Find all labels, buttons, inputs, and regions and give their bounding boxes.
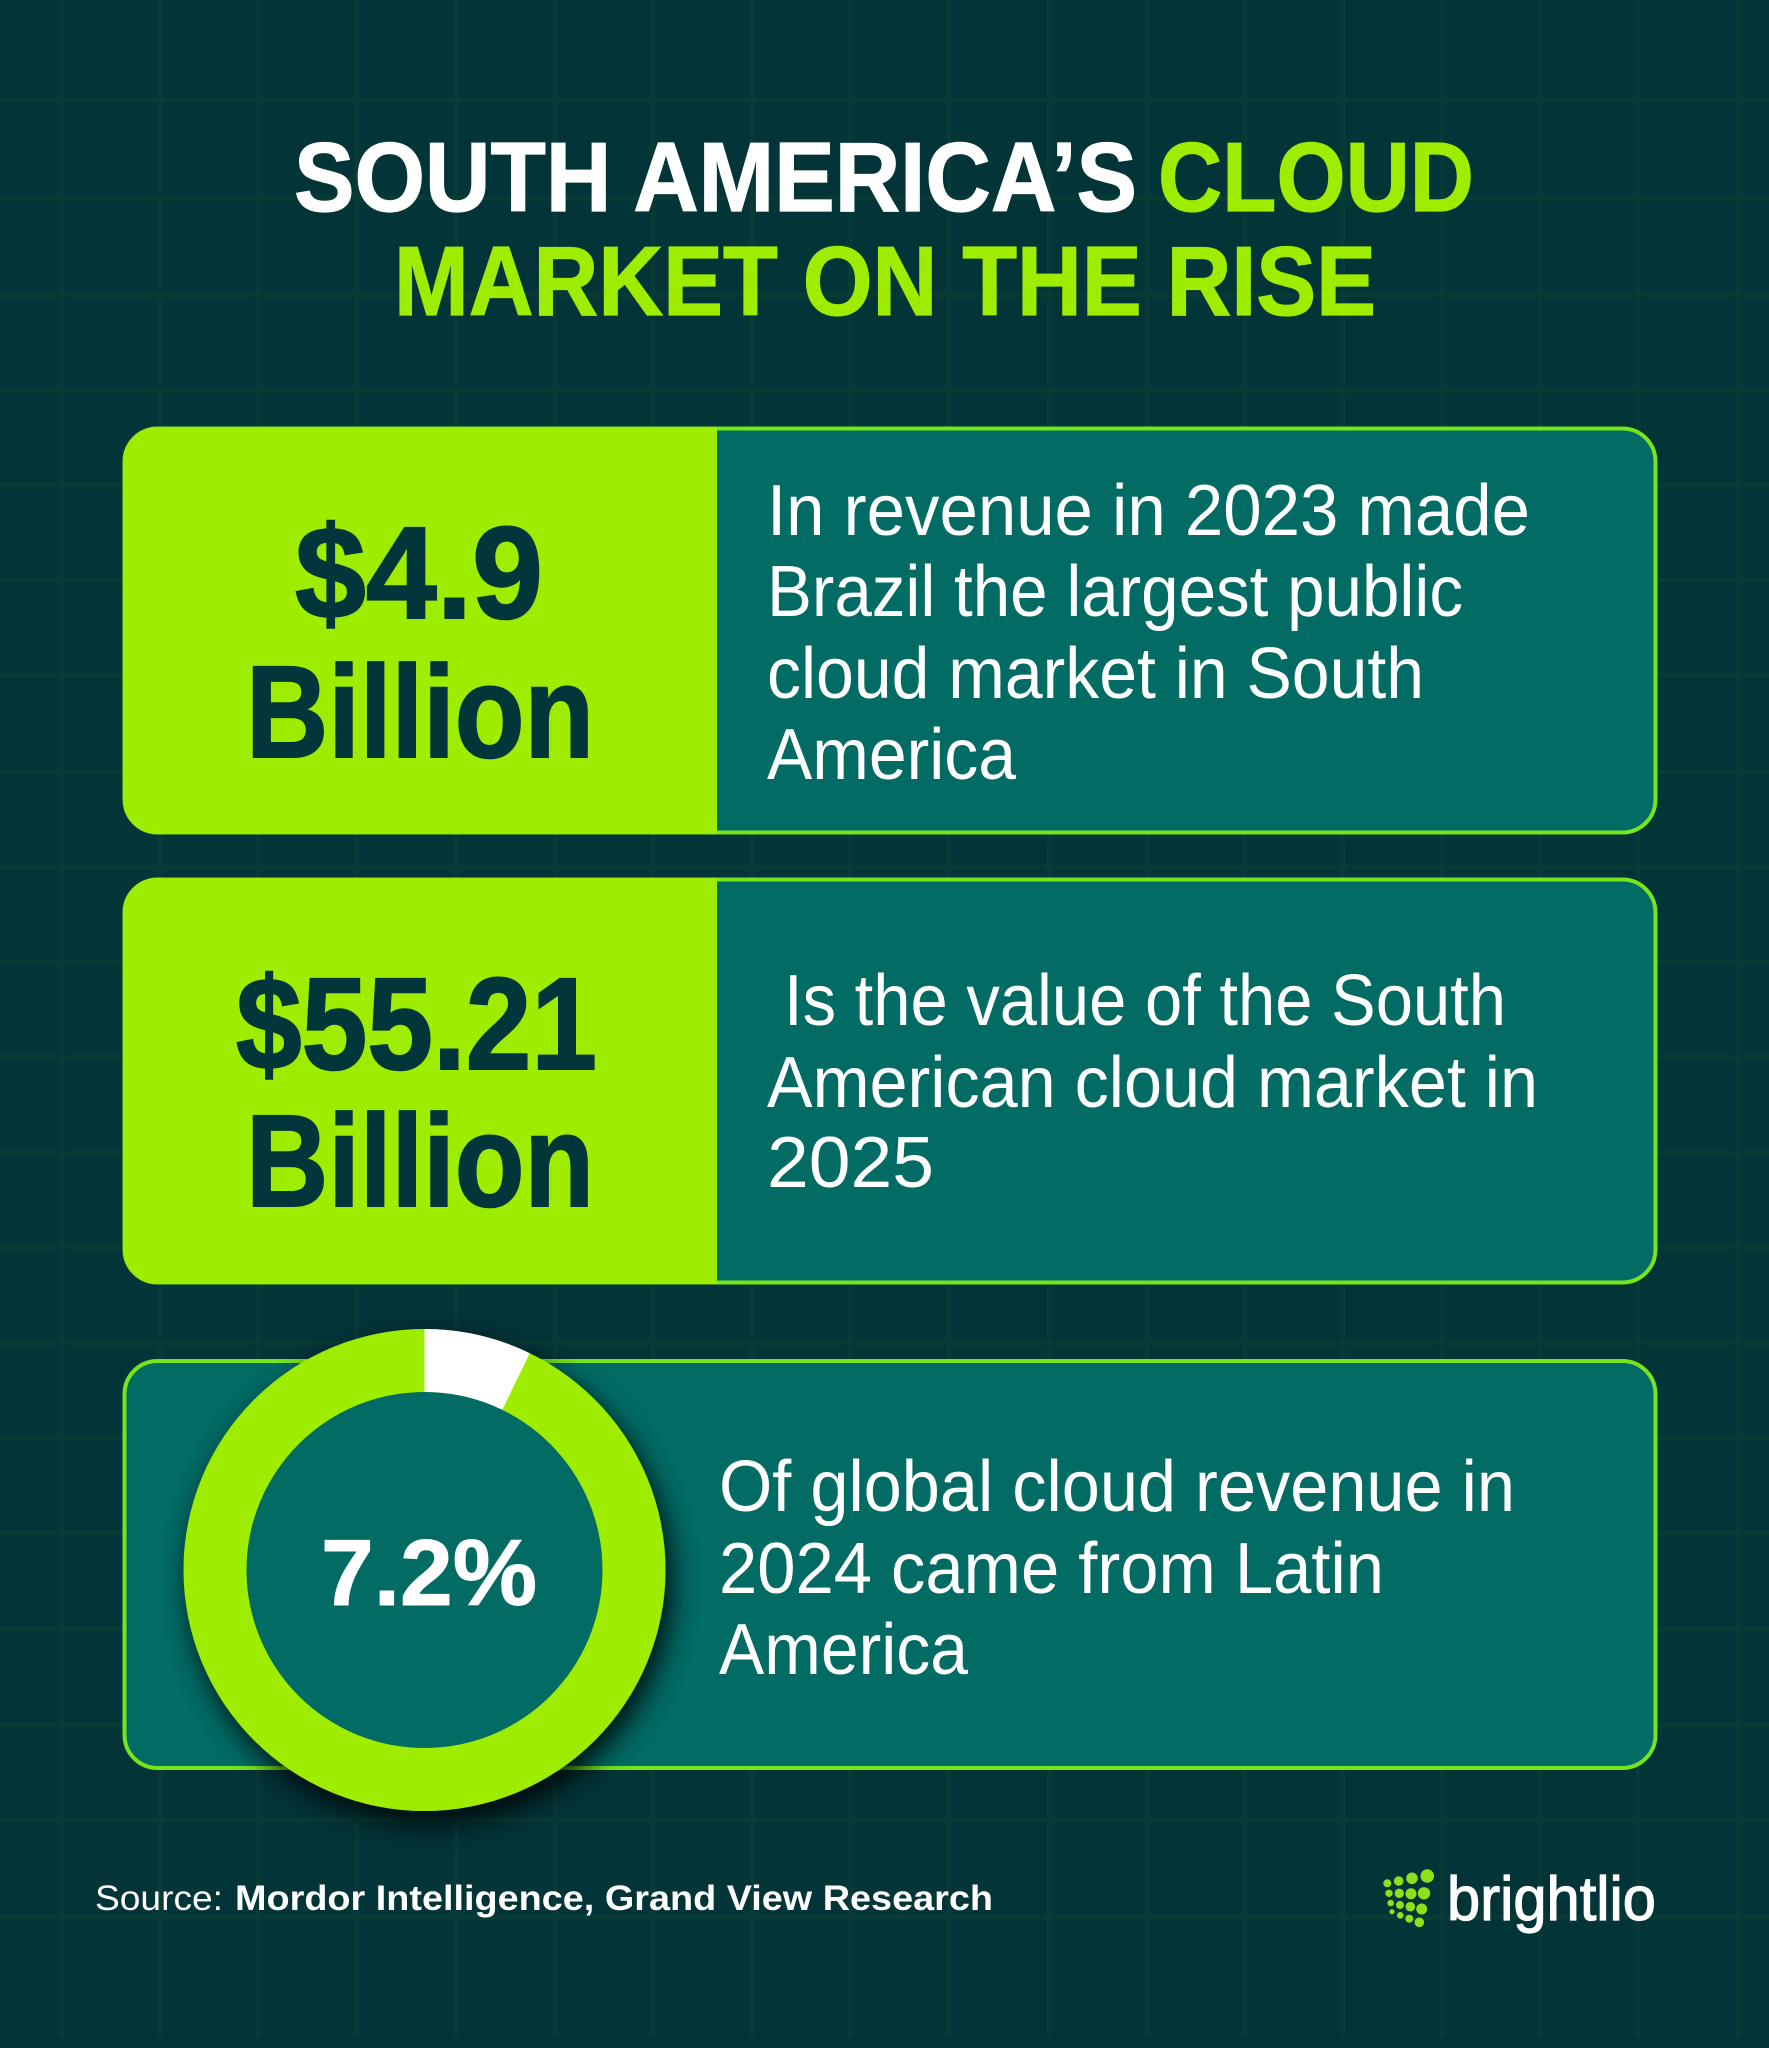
stat block: $55.21 Billion: $55.21	[236, 950, 597, 1097]
description: market value: Is the value of the South	[784, 961, 1506, 1041]
description: Brazil revenue: In revenue in 2023 made	[767, 471, 1530, 551]
description: Brazil revenue: Brazil the largest public	[767, 552, 1463, 632]
panel: South American market value	[122, 877, 1657, 1285]
panel: Brazil revenue	[122, 426, 1657, 835]
description: global share: Of global cloud revenue in	[719, 1447, 1515, 1527]
description: market value	[767, 961, 1538, 1203]
title: SOUTH AMERICA’S	[294, 122, 1137, 232]
description: global share: America	[719, 1610, 969, 1690]
stat block: $4.9 Billion: $4.9	[295, 499, 543, 646]
description: global share	[719, 1447, 1515, 1690]
title: CLOUD	[1158, 122, 1474, 232]
donut value: 7.2%	[321, 1520, 537, 1625]
donut chart: 7.2%	[184, 1329, 666, 1811]
description: Brazil revenue: America	[767, 715, 1017, 795]
stat block: $55.21 Billion	[122, 877, 717, 1285]
title	[294, 122, 1474, 336]
panel: Latin America share	[124, 1329, 1656, 1811]
description: Brazil revenue	[767, 471, 1530, 795]
wordmark: brightlio	[1447, 1865, 1656, 1934]
donut centre	[246, 1392, 602, 1748]
stat block: $55.21 Billion: Billion	[246, 1087, 594, 1234]
logo: brightlio	[1383, 1865, 1656, 1934]
description: market value: 2025	[767, 1123, 934, 1203]
stat block: $4.9 Billion	[122, 426, 717, 835]
source note: Source:	[95, 1879, 223, 1918]
description: market value: American cloud market in	[767, 1043, 1538, 1123]
title: MARKET ON THE RISE	[394, 226, 1376, 336]
stat block: $4.9 Billion: Billion	[246, 638, 594, 785]
donut segment: 7.2% share	[424, 1329, 530, 1410]
description: Brazil revenue: cloud market in South	[767, 634, 1424, 714]
icon: dotted shield	[1383, 1869, 1434, 1927]
description: global share: 2024 came from Latin	[719, 1529, 1384, 1609]
source note: Mordor Intelligence, Grand View Research	[235, 1879, 993, 1918]
